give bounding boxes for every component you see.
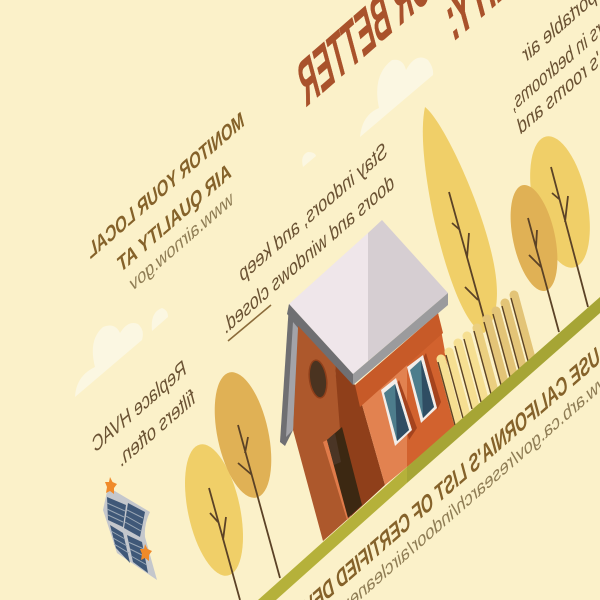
house	[280, 220, 458, 541]
roof right	[368, 220, 448, 361]
right wall dark	[407, 313, 458, 467]
tree: light left	[175, 439, 253, 600]
tree: tall	[423, 107, 497, 333]
tip: monitor air quality: AIR QUALITY AT	[115, 159, 233, 278]
gable trim	[280, 304, 298, 446]
tree: dark right	[502, 181, 566, 332]
door	[327, 427, 362, 518]
wall top band	[355, 313, 443, 407]
gable wall	[293, 322, 350, 541]
cloud: small upper	[302, 152, 316, 167]
cloud: lower	[75, 323, 143, 397]
roof edge light	[353, 293, 448, 385]
door light panel	[327, 433, 341, 465]
cloud: small lower	[152, 308, 168, 331]
icon: air filter	[103, 477, 157, 580]
tip: replace filters: filters often.	[116, 385, 197, 472]
tree: light right	[520, 131, 600, 307]
tip: replace filters: Replace HVAC	[90, 356, 188, 458]
left window	[381, 378, 417, 446]
right window	[407, 353, 441, 423]
tree: dark left	[205, 367, 281, 578]
title	[292, 0, 600, 120]
tip: monitor air quality: www.airnow.gov	[128, 187, 236, 297]
roof edge dark	[287, 304, 353, 385]
cloud: upper	[360, 58, 433, 137]
ground band	[258, 297, 600, 600]
right wall light	[357, 350, 407, 485]
fence	[438, 295, 531, 425]
gable wall shade	[335, 365, 385, 519]
tip: stay indoors: doors and windows closed.	[220, 170, 396, 339]
tip: stay indoors: Stay indoors, and keep	[237, 138, 389, 287]
round window	[307, 359, 329, 399]
door frame	[323, 440, 351, 520]
roof left	[289, 233, 368, 374]
tip: monitor air quality: MONITOR YOUR LOCAL	[85, 108, 246, 264]
